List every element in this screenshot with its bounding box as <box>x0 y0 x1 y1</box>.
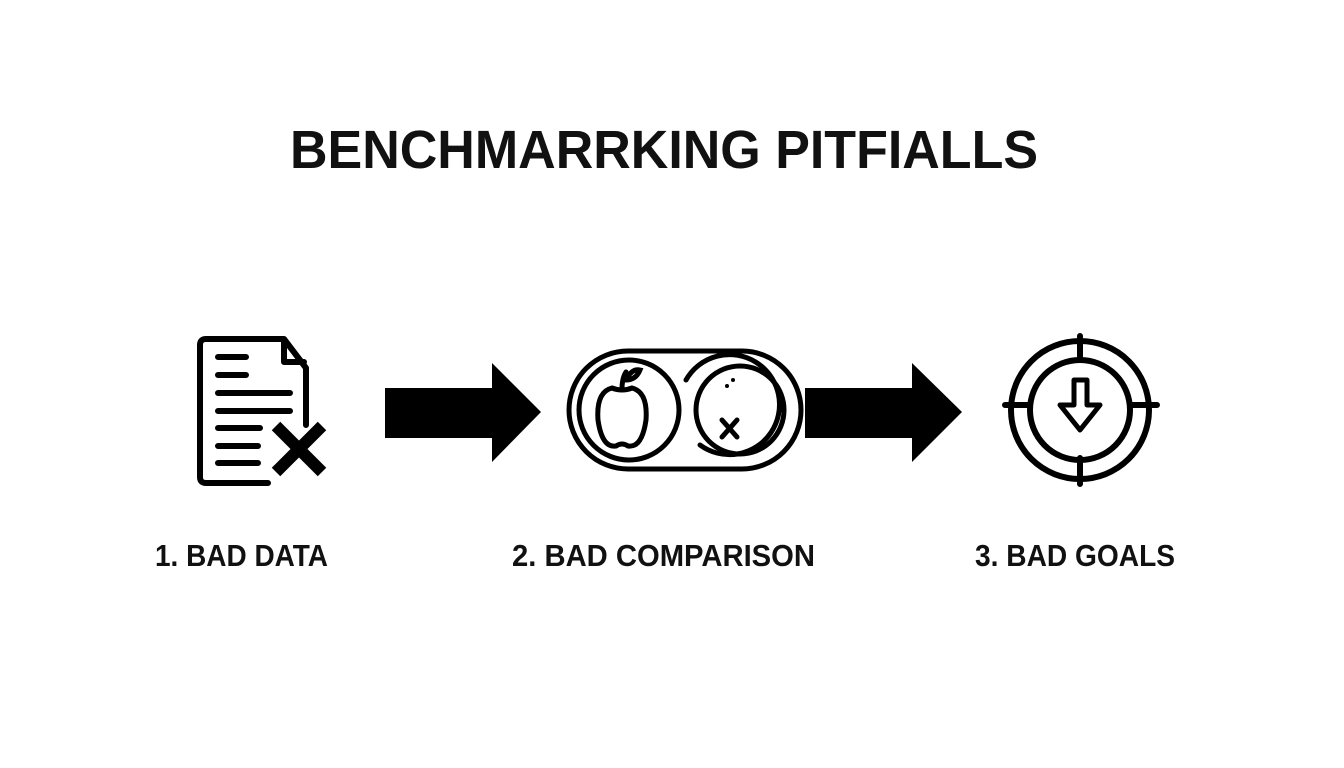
label 3: 3. BAD GOALS <box>975 538 1175 573</box>
icon: target with down arrow <box>1005 336 1157 484</box>
arrow 2 <box>805 363 962 462</box>
icon: document with x <box>200 339 322 483</box>
icon: apples vs oranges comparison <box>569 351 801 469</box>
label 2: 2. BAD COMPARISON <box>512 538 815 573</box>
arrow 1 <box>385 363 541 462</box>
label 1: 1. BAD DATA <box>155 538 328 573</box>
title: BENCHMARRKING PITFIALLS <box>290 120 1038 180</box>
